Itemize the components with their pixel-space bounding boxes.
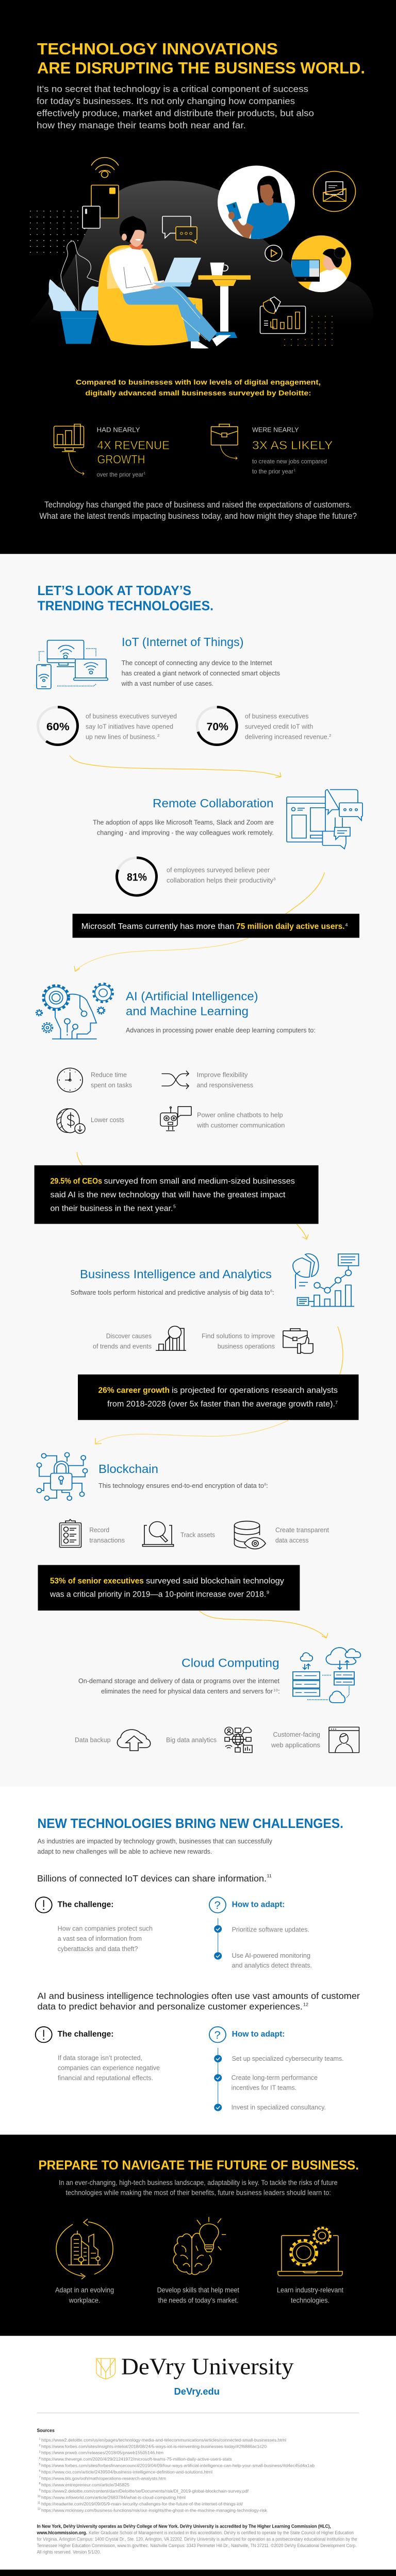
- sources: https://www2.deloitte.com/content/dam/Deloitte/se/Documents/risk/DI_2019-global-blockchain-survey.pdf: [41, 2488, 249, 2494]
- panel: trending technologies: [0, 554, 396, 1787]
- arrow: remote to teams callout: [286, 872, 324, 914]
- stat text: 60%: up new lines of business.: [86, 733, 157, 741]
- title: ARE DISRUPTING THE BUSINESS WORLD.: [37, 59, 365, 77]
- arrow: callout to cloud: [199, 1611, 328, 1638]
- icon: clock: [57, 1068, 82, 1092]
- icon: chat bubbles: [162, 216, 197, 243]
- icon: yellow circle woman at monitor: [291, 235, 351, 293]
- section: AI and machine learning: [36, 984, 316, 1133]
- item: big data analytics: Big data analytics: [166, 1736, 217, 1743]
- heading: [38, 583, 213, 613]
- item: customer-facing apps: [271, 1727, 359, 1753]
- item: power online chatbots: Power online chatbots to help: [197, 1111, 283, 1118]
- icon: exclamation: [36, 2027, 52, 2042]
- item: customer-facing apps: Customer-facing: [273, 1731, 320, 1738]
- arrow: callout to blockchain: [95, 1420, 289, 1444]
- intro text: It's no secret that technology is a critical component of success: [37, 84, 308, 94]
- accreditation text: In New York, DeVry University operates as DeVry College of New York. DeVry University is accredited by The Higher Learning Commission (HLC),: [37, 2524, 331, 2529]
- icon: monitor chart with arrow: [54, 424, 84, 475]
- stat: 4x revenue growth: 1: [143, 471, 146, 475]
- challenge block 1: [36, 1897, 153, 1953]
- challenge block 1: cyberattacks and data theft?: [58, 1945, 138, 1953]
- heading: TRENDING TECHNOLOGIES.: [38, 598, 213, 613]
- icon: question: [209, 2027, 226, 2042]
- callout: 53% senior executives: surveyed said blockchain technology: [146, 1577, 284, 1585]
- description: [93, 819, 274, 837]
- section: remote collaboration: Remote Collaboration: [153, 796, 274, 810]
- callout: 26% career growth: 26% career growth: [98, 1386, 170, 1395]
- item: discover causes: [93, 1326, 186, 1350]
- stat: 3x as likely: to the prior year: [252, 468, 294, 475]
- sources: 3: [39, 2451, 41, 2453]
- stat text: 81%: 3: [273, 877, 275, 881]
- icon: magnifier over bars: [156, 1326, 186, 1350]
- icon: question: ?: [214, 2029, 221, 2041]
- subheading: customer data: data to predict behavior and personalize customer experiences.: [38, 2002, 303, 2011]
- item: adapt in workplace: [55, 2219, 114, 2304]
- section: IoT: IoT (Internet of Things): [122, 636, 244, 649]
- stat: 3x as likely: 3X AS LIKELY: [252, 438, 333, 452]
- stat text: 70%: delivering increased revenue.: [245, 733, 329, 741]
- icon: briefcase with thumbs up: [283, 1329, 313, 1353]
- item: record transactions: transactions: [89, 1536, 125, 1544]
- item: customer-facing apps: web applications: [271, 1741, 320, 1749]
- section: blockchain: 8: [264, 1482, 266, 1487]
- stat: 4x revenue growth: HAD NEARLY: [97, 426, 140, 433]
- item: develop skills: Develop skills that help meet: [157, 2286, 239, 2294]
- stat: 81% donut: [117, 858, 157, 895]
- section: blockchain: This technology ensures end-to-end encryption of data to: [98, 1482, 264, 1489]
- item: big data analytics: [166, 1727, 252, 1753]
- stat: 81% donut: 81%: [127, 871, 147, 883]
- sources: https://www2.deloitte.com/us/en/pages/technology-media-and-telecommunications/articles/connected-small-businesses.html: [41, 2437, 286, 2443]
- item: learn technologies: Learn industry-relevant: [277, 2286, 343, 2294]
- challenge block 1: How can companies protect such: [58, 1925, 153, 1932]
- stat text: 60%: of business executives surveyed: [86, 713, 177, 720]
- icon: laptop with magnifier: [142, 1522, 173, 1547]
- illustration: remote workers: [26, 158, 373, 348]
- sources: 5: [39, 2463, 41, 2466]
- icon: potted plant: [48, 241, 103, 344]
- man with laptop: [109, 216, 231, 348]
- item: data backup: Data backup: [75, 1736, 111, 1743]
- item: track assets: [142, 1522, 215, 1547]
- panel: prepare for the future: PREPARE TO NAVIGATE THE FUTURE OF BUSINESS.: [38, 2158, 359, 2173]
- heading: LET’S LOOK AT TODAY’S: [38, 583, 191, 598]
- description: The concept of connecting any device to the Internet: [122, 659, 272, 667]
- title: [37, 40, 365, 77]
- item: lower costs: [57, 1109, 124, 1133]
- item: discover causes: Discover causes: [106, 1332, 152, 1340]
- challenge block 2: financial and reputational effects.: [58, 2074, 153, 2081]
- callout: CEOs on AI: [35, 1165, 319, 1224]
- accreditation text: [37, 2524, 357, 2554]
- title: TECHNOLOGY INNOVATIONS: [37, 40, 278, 58]
- yellow dot grid: [284, 316, 333, 346]
- subheading: IoT devices: 11: [267, 1873, 272, 1878]
- stat text: 81%: [167, 866, 275, 884]
- item: find solutions: Find solutions to improve: [202, 1332, 275, 1340]
- callout: 53% senior executives: 53% of senior executives: [50, 1577, 144, 1585]
- sources: https://www.forbes.com/sites/insights-inteliot/2018/08/24/5-ways-iot-is-reinventing-businesses-today/#2f6886ac1c20: [41, 2444, 267, 2449]
- stat text: 70%: [245, 713, 331, 741]
- sources: 4: [39, 2457, 41, 2460]
- sources: 1: [39, 2438, 41, 2441]
- icon: connected devices: [37, 640, 108, 689]
- item: power online chatbots: [160, 1107, 285, 1131]
- section: business intelligence: [71, 1254, 358, 1353]
- intro text: [59, 2179, 338, 2197]
- panel: footer: [0, 2336, 396, 2570]
- arrow: teams callout to AI: [74, 938, 249, 971]
- item: learn technologies: technologies.: [291, 2297, 329, 2304]
- sources: 8: [39, 2482, 41, 2485]
- icon: question: ?: [214, 1900, 221, 1911]
- description: has created a giant network of connected smart objects: [122, 669, 280, 677]
- item: improve flexibility: and responsiveness: [197, 1081, 253, 1089]
- item: discover causes: of trends and events: [93, 1343, 152, 1350]
- callout: CEOs on AI: 5: [173, 1204, 176, 1209]
- timeline with check marks: [214, 2048, 222, 2111]
- item: record transactions: [60, 1519, 125, 1547]
- stat: 4x revenue growth: 4X REVENUE: [97, 438, 170, 452]
- sources: https://www.cio.com/article/2439504/business-intelligence-definition-and-solutions.html: [41, 2469, 212, 2475]
- sources: 2: [39, 2444, 41, 2447]
- stat text: 81%: of employees surveyed believe peer: [167, 866, 270, 874]
- section: business intelligence: Business Intelligence and Analytics: [80, 1268, 272, 1281]
- panel: new challenges: [0, 1787, 396, 2134]
- challenge block 2: [36, 2027, 160, 2081]
- sources: https://readwrite.com/2019/09/05/9-main-security-challenges-for-the-future-of-the-internet-of-things-iot/: [41, 2501, 243, 2506]
- item: transparent data access: [234, 1521, 329, 1549]
- item: improve flexibility: [162, 1071, 253, 1089]
- closing question text: [39, 500, 357, 521]
- intro text: adapt to new challenges will be able to achieve new rewards.: [38, 1848, 212, 1855]
- item: find solutions: [202, 1329, 313, 1353]
- stat text: 60%: say IoT initiatives have opened: [86, 723, 173, 731]
- stat text: 70%: surveyed credit IoT with: [245, 723, 313, 731]
- item: transparent data access: data access: [275, 1536, 309, 1544]
- deloitte intro text: Compared to businesses with low levels of digital engagement,: [76, 379, 321, 386]
- stat text: 70%: 2: [329, 733, 331, 738]
- arrow: IoT to remote collaboration: [70, 756, 281, 777]
- subheading: IoT devices: Billions of connected IoT devices can share information.: [37, 1873, 267, 1884]
- bottom black bar: [0, 2570, 396, 2576]
- callout: 53% senior executives: [38, 1565, 300, 1611]
- deloitte intro text: digitally advanced small businesses surveyed by Deloitte:: [86, 389, 311, 397]
- callout: CEOs on AI: on their business in the next year.: [51, 1205, 173, 1213]
- icon: devices: [82, 185, 119, 228]
- panel: hero dark section: [0, 0, 396, 554]
- intro text: As industries are impacted by technology growth, businesses that can successfully: [38, 1837, 272, 1845]
- challenge block 2: If data storage isn’t protected,: [58, 2054, 142, 2061]
- sources: https://www.prweb.com/releases/2018/05/prweb15505146.htm: [41, 2450, 163, 2455]
- icon: web user window: [329, 1727, 359, 1753]
- subheading: customer data: AI and business intelligence technologies often use vast amounts of customer: [38, 1991, 360, 2001]
- item: adapt in workplace: Adapt in an evolving: [55, 2286, 114, 2294]
- sources: 9: [39, 2489, 41, 2492]
- subheading: customer data: 12: [303, 2002, 308, 2007]
- closing question text: What are the latest trends impacting business today, and how might they shape the future?: [39, 511, 357, 521]
- item: learn technologies: [277, 2228, 343, 2304]
- white dot grid: [30, 211, 85, 252]
- section: blockchain: :: [266, 1482, 268, 1489]
- stat: 4x revenue growth: over the prior year: [97, 471, 144, 478]
- callout: microsoft teams: 75 million daily active users.: [236, 922, 345, 931]
- section: AI and machine learning: Advances in processing power enable deep learning computers to:: [126, 1026, 316, 1034]
- arrow: AI to callout: [77, 1152, 82, 1165]
- chair: [98, 245, 203, 345]
- stat text: 60%: [86, 713, 177, 741]
- description: eliminates the need for physical data centers and servers for: [101, 1688, 273, 1695]
- sources: https://www.forbes.com/sites/forbesfinancecouncil/2019/04/09/four-ways-artificial-intelligence-can-help-your-small-business/#d4ec45d4a1ab: [41, 2463, 315, 2468]
- timeline with check marks: [214, 1918, 222, 1959]
- section: business intelligence: 6: [270, 1289, 272, 1293]
- sources: 7: [39, 2476, 41, 2479]
- sources: 10: [38, 2495, 41, 2498]
- panel: prepare for the future: [0, 2134, 396, 2336]
- adapt block 2: [209, 2027, 344, 2111]
- sources: https://www.infoworld.com/article/2683784/what-is-cloud-computing.html: [41, 2495, 186, 2500]
- icon: play button: [265, 245, 282, 261]
- callout: 53% senior executives: was a critical priority in 2019—a 10-point increase over 2018.: [50, 1590, 266, 1599]
- panel: new challenges: NEW TECHNOLOGIES BRING NEW CHALLENGES.: [38, 1816, 343, 1831]
- adapt block 2: Invest in specialized consultancy.: [232, 2104, 326, 2111]
- description: with a vast number of use cases.: [121, 680, 213, 687]
- item: data backup: [75, 1730, 151, 1751]
- sources: https://www.mckinsey.com/business-functions/risk/our-insights/the-ghost-in-the-machine-managing-technology-risk: [41, 2508, 268, 2513]
- item: improve flexibility: Improve flexibility: [197, 1071, 248, 1079]
- section: blockchain: Blockchain: [98, 1462, 158, 1476]
- description: 10: [273, 1688, 278, 1692]
- dark blob background: [26, 181, 373, 327]
- item: transparent data access: Create transparent: [275, 1526, 329, 1534]
- item: power online chatbots: with customer communication: [196, 1122, 285, 1129]
- adapt block 1: How to adapt:: [232, 1901, 285, 1909]
- challenge block 1: a vast sea of information from: [58, 1935, 142, 1942]
- logo: DeVry University: DeVry University: [121, 2353, 294, 2380]
- intro text: [37, 84, 314, 130]
- adapt block 2: Set up specialized cybersecurity teams.: [232, 2055, 344, 2062]
- intro text: [38, 1837, 272, 1855]
- challenge block 2: The challenge:: [58, 2030, 113, 2039]
- description: [78, 1677, 280, 1695]
- stat: 60% donut: [38, 707, 77, 745]
- icon: database with eye: [234, 1521, 266, 1549]
- callout: CEOs on AI: 29.5% of CEOs: [51, 1177, 102, 1186]
- heading: [126, 990, 258, 1018]
- item: record transactions: Record: [89, 1526, 109, 1534]
- adapt block 1: [209, 1897, 312, 1969]
- item: reduce time: Reduce time: [91, 1071, 127, 1079]
- icon: analytics charts: [293, 1254, 359, 1307]
- section: blockchain: [37, 1452, 329, 1549]
- stat text: 60%: 2: [157, 733, 159, 738]
- icon: brain and light bulb: [173, 2217, 226, 2275]
- stat: 4x revenue growth: GROWTH: [97, 453, 145, 466]
- sources: 11: [38, 2501, 40, 2504]
- icon: lock with circuit: [37, 1452, 88, 1500]
- item: develop skills: [157, 2217, 239, 2304]
- challenge block 1: The challenge:: [58, 1901, 113, 1909]
- icon: wifi signal: [91, 158, 119, 178]
- deloitte intro text: [76, 379, 321, 397]
- stat: 3x as likely: WERE NEARLY: [252, 426, 299, 433]
- stat: 60% donut: 60%: [46, 721, 70, 733]
- subheading: customer data: [38, 1991, 360, 2011]
- item: develop skills: the needs of today’s market.: [158, 2297, 238, 2304]
- description: The adoption of apps like Microsoft Teams, Slack and Zoom are: [93, 819, 274, 826]
- sources: 6: [39, 2470, 41, 2472]
- adapt block 2: incentives for IT teams.: [232, 2084, 296, 2091]
- icon: briefcase with arrow: [211, 424, 238, 460]
- stat text: 70%: of business executives: [245, 713, 309, 720]
- icon: laptop with gears: [278, 2228, 342, 2276]
- callout: CEOs on AI: said AI is the new technology that will have the greatest impact: [51, 1191, 286, 1199]
- stat: 3x as likely: 1: [294, 469, 296, 472]
- item: adapt in workplace: workplace.: [69, 2297, 101, 2304]
- sources: [37, 2428, 315, 2513]
- adapt block 1: and analytics detect threats.: [232, 1961, 312, 1969]
- item: find solutions: business operations: [218, 1343, 275, 1350]
- adapt block 1: Use AI-powered monitoring: [232, 1952, 310, 1959]
- challenge block 2: companies can experience negative: [58, 2064, 160, 2072]
- intro text: effectively produce, market and distribute their products, but also: [37, 108, 314, 118]
- section: cloud computing: Cloud Computing: [182, 1656, 279, 1669]
- icon: coin with arrow: [57, 1109, 85, 1133]
- accreditation text: Keller Graduate School of Management is included in this accreditation. DeVry is certified to operate by the State Council of Higher Education: [89, 2530, 354, 2535]
- stat: 70% donut: 70%: [207, 721, 228, 733]
- intro text: how they manage their teams both near and far.: [37, 121, 246, 130]
- section: business intelligence: :: [272, 1289, 274, 1296]
- accreditation text: All rights reserved. Version 5/1/20.: [37, 2549, 101, 2554]
- panel: footer: DeVry.edu: [174, 2386, 220, 2397]
- intro text: technologies while making the most of their benefits, future business leaders should learn to:: [66, 2189, 331, 2197]
- icon: collaboration windows: [287, 790, 362, 849]
- icon: shuffle arrows: [162, 1071, 189, 1089]
- description: changing - and improving - the way colleagues work remotely.: [97, 829, 274, 837]
- section: cloud computing: [75, 1648, 360, 1753]
- item: lower costs: Lower costs: [91, 1116, 124, 1124]
- accreditation text: www.hlcommission.org.: [37, 2530, 87, 2535]
- arrow: BI to callout: [338, 1327, 343, 1375]
- sources: https://www.entrepreneur.com/article/345825: [41, 2482, 129, 2487]
- callout: 26% career growth: [78, 1375, 359, 1420]
- icon: cloud servers: [293, 1648, 360, 1703]
- icon: city with cycle arrows: [56, 2219, 113, 2279]
- icon: video call circle woman with phone: [218, 165, 295, 240]
- sources: https://www.theverge.com/2020/4/29/21241972/microsoft-teams-75-million-daily-active-users-stats: [41, 2456, 232, 2462]
- icon: AI head with gears: [36, 984, 113, 1039]
- callout: 26% career growth: from 2018-2028 (over 5x faster than the average growth rate).: [107, 1400, 335, 1409]
- table with cup: [198, 263, 251, 338]
- icon: exclamation: [36, 1897, 52, 1913]
- icon: robot with speech bubble: [160, 1107, 191, 1131]
- intro text: In an ever-changing, high-tech business landscape, adaptability is key. To tackle the risks of future: [59, 2179, 338, 2187]
- stat text: 81%: collaboration helps their productivity: [167, 876, 273, 884]
- sources: https://www.bls.gov/ooh/math/operations-research-analysts.htm: [41, 2476, 166, 2481]
- callout: microsoft teams: 4: [345, 922, 348, 927]
- description: [121, 659, 280, 687]
- intro text: for today's businesses. It's not only changing how companies: [37, 96, 295, 106]
- stat: 70% donut: [197, 707, 237, 745]
- icon: cloud upload: [117, 1730, 151, 1751]
- arrow: callout to BI: [297, 1224, 308, 1239]
- icon: data globe network: [225, 1727, 252, 1753]
- heading: AI (Artificial Intelligence): [126, 990, 258, 1003]
- sources: Sources: [37, 2428, 55, 2433]
- icon: chart card: [260, 297, 305, 333]
- section: business intelligence: Software tools perform historical and predictive analysis of big data to: [71, 1289, 270, 1296]
- item: track assets: Track assets: [180, 1531, 215, 1538]
- icon: clipboard: [60, 1519, 81, 1547]
- sources: 12: [38, 2508, 41, 2511]
- section: IoT: [37, 636, 331, 745]
- closing question text: Technology has changed the pace of business and raised the expectations of customers.: [44, 500, 352, 510]
- description: On-demand storage and delivery of data or programs over the internet: [78, 1677, 279, 1685]
- icon: question: [209, 1897, 226, 1913]
- callout: 26% career growth: is projected for operations research analysts: [172, 1386, 338, 1395]
- section: remote collaboration: [93, 790, 362, 895]
- stat: 4x revenue growth: [54, 424, 170, 478]
- description: :: [278, 1688, 280, 1695]
- callout: CEOs on AI: surveyed from small and medium-sized businesses: [104, 1177, 295, 1186]
- callout: microsoft teams: [73, 914, 359, 938]
- callout: 53% senior executives: 9: [267, 1590, 269, 1595]
- icon: email circle: [314, 171, 356, 211]
- item: reduce time: [57, 1068, 132, 1092]
- stat: 3x as likely: to create new jobs compared: [252, 458, 327, 465]
- adapt block 1: Prioritize software updates.: [232, 1926, 309, 1933]
- callout: microsoft teams: Microsoft Teams currently has more than: [81, 922, 234, 931]
- heading: and Machine Learning: [126, 1005, 249, 1018]
- adapt block 2: How to adapt:: [232, 2030, 285, 2039]
- stat: 3x as likely: [211, 424, 333, 475]
- callout: 26% career growth: 7: [335, 1400, 338, 1405]
- adapt block 2: Create long-term performance: [232, 2074, 318, 2081]
- item: reduce time: spent on tasks: [91, 1081, 132, 1089]
